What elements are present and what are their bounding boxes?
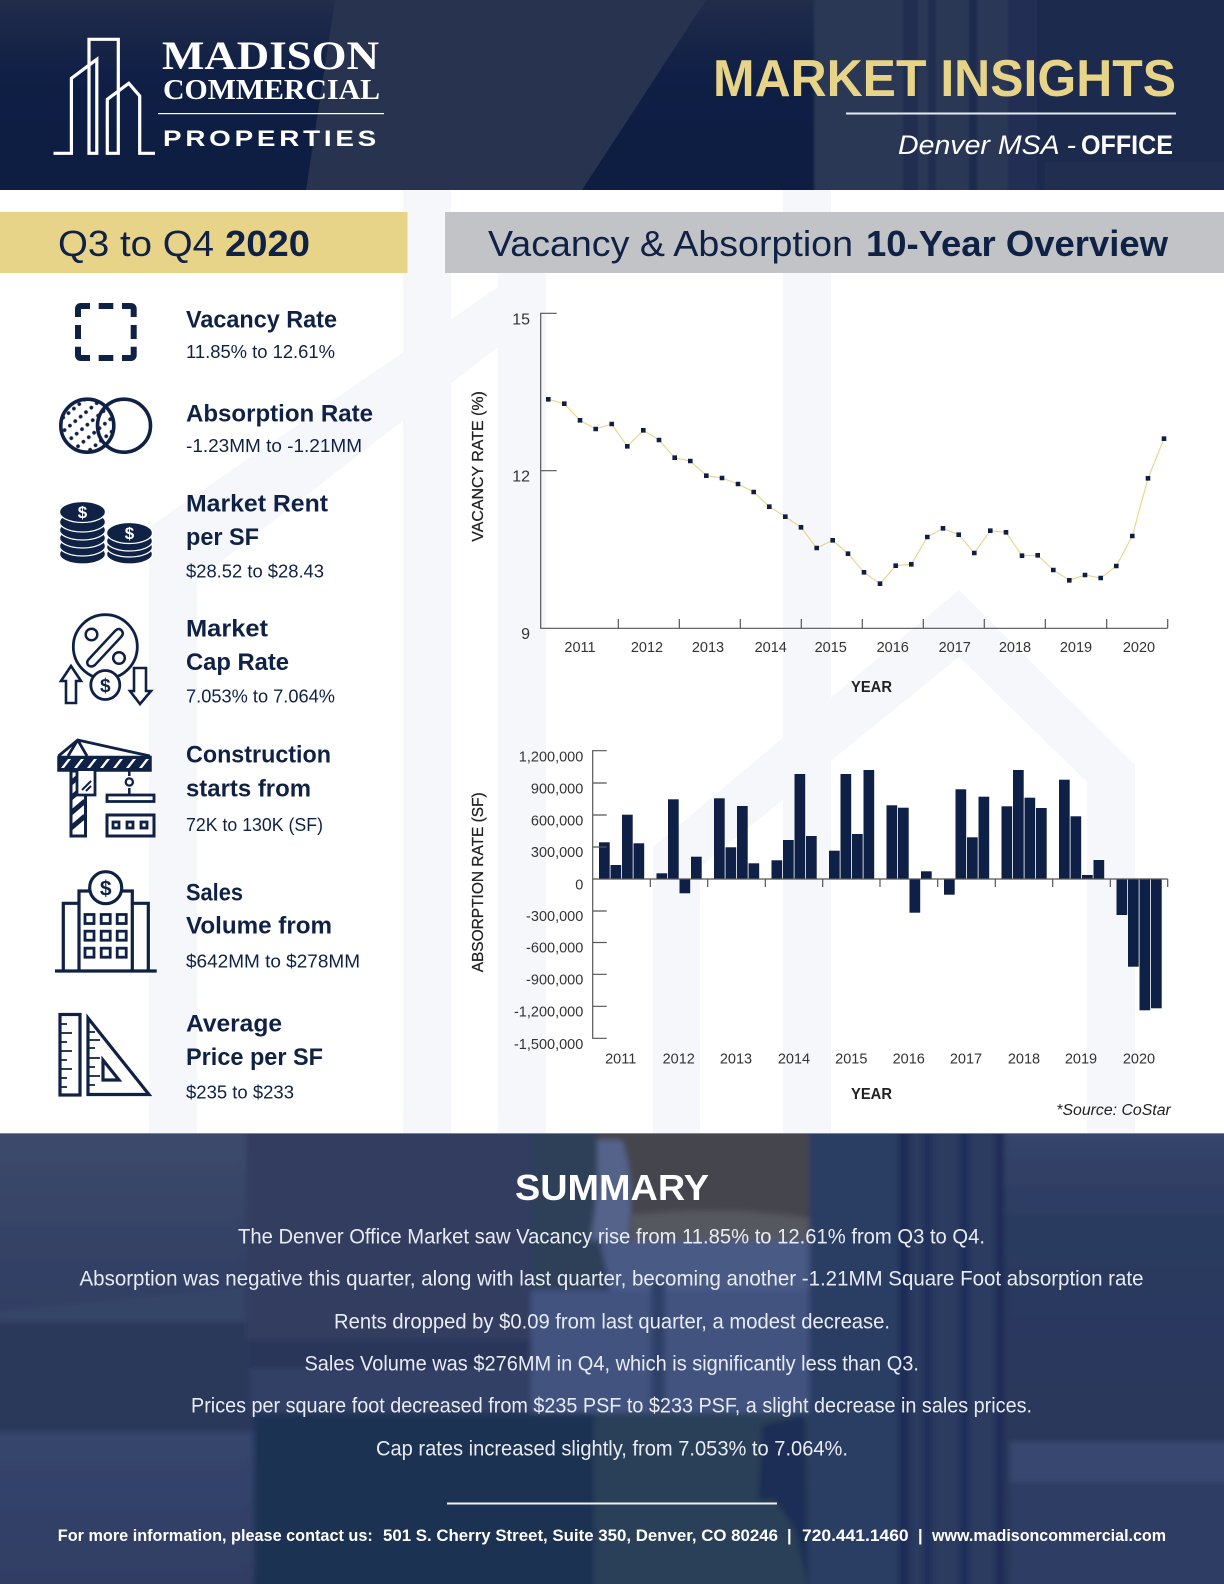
icon: coin stacks: $ xyxy=(125,524,135,543)
x axis labels: 2017 xyxy=(939,640,971,656)
metric heading: Volume from xyxy=(186,912,332,939)
logo wordmark: Properties: PROPERTIES xyxy=(163,126,380,151)
subtitle: Denver MSA Office: Denver MSA - xyxy=(898,130,1076,160)
icon: tower crane xyxy=(58,740,154,836)
header banner xyxy=(0,0,1224,197)
metric heading: Price per SF xyxy=(186,1044,323,1071)
y axis labels: 9 xyxy=(521,626,530,643)
summary text: Rents dropped by $0.09 from last quarter, a modest decrease. xyxy=(334,1310,890,1333)
y axis labels: -600,000 xyxy=(526,941,583,957)
chart axes xyxy=(541,313,1168,628)
x axis labels: 2011 xyxy=(564,640,596,656)
watermark: building outline xyxy=(149,190,1135,1135)
metric heading: Market xyxy=(186,616,268,643)
metric heading: Vacancy Rate xyxy=(186,307,337,334)
data line xyxy=(548,399,1164,584)
y axis labels: 15 xyxy=(512,312,530,329)
icon: overlapping circles xyxy=(61,399,150,452)
summary text: Cap rates increased slightly, from 7.053% to 7.064%. xyxy=(376,1437,848,1460)
x axis labels: 2016 xyxy=(893,1051,925,1067)
logo wordmark: Madison: MADISON xyxy=(162,33,379,78)
metric heading: Absorption Rate xyxy=(186,401,373,428)
summary text xyxy=(80,1225,1144,1460)
summary text: Sales Volume was $276MM in Q4, which is significantly less than Q3. xyxy=(304,1353,919,1376)
summary heading: SUMMARY xyxy=(515,1167,709,1208)
x axis labels: 2019 xyxy=(1060,640,1092,656)
line chart: vacancy rate xyxy=(470,312,1168,696)
background photo tint xyxy=(0,1125,1224,1584)
x axis labels: 2020 xyxy=(1123,640,1155,656)
icon: ruler and set square xyxy=(60,1014,149,1095)
metric value: 11.85% to 12.61% xyxy=(186,342,335,362)
contact line: 501 S. Cherry Street, Suite 350, Denver, CO 80246 xyxy=(383,1527,778,1545)
x axis labels xyxy=(605,1051,1155,1067)
logo: Madison Commercial Properties xyxy=(54,33,384,153)
data markers xyxy=(546,397,1166,586)
contact line: For more information, please contact us: xyxy=(58,1527,373,1545)
panel top edge xyxy=(0,1133,1224,1134)
x axis title: YEAR xyxy=(851,679,892,696)
icon: bank building xyxy=(55,872,157,971)
panel: summary xyxy=(0,1125,1224,1584)
metric: absorption rate xyxy=(61,399,373,456)
y axis labels: 1,200,000 xyxy=(519,750,583,766)
y axis labels xyxy=(512,312,530,643)
heading band: Q3 to Q4 2020: 2020 xyxy=(225,223,310,264)
contact line: | xyxy=(787,1527,792,1545)
x axis title: YEAR xyxy=(851,1086,892,1103)
y axis labels: 900,000 xyxy=(531,781,583,797)
metric heading: Cap Rate xyxy=(186,649,289,676)
x axis labels: 2018 xyxy=(1008,1051,1040,1067)
footer divider xyxy=(447,1502,777,1504)
heading band: Vacancy and Absorption 10-Year Overview xyxy=(445,212,1224,273)
y axis labels: -1,200,000 xyxy=(514,1005,583,1021)
metric value: 72K to 130K (SF) xyxy=(186,815,323,835)
metric: market cap rate xyxy=(61,615,335,707)
heading band: Q3 to Q4 2020: Q3 to Q4 xyxy=(58,223,214,264)
y axis labels: 600,000 xyxy=(531,814,583,830)
x axis labels: 2012 xyxy=(631,640,663,656)
metric heading: starts from xyxy=(186,776,311,803)
icon: coin stacks: $ xyxy=(78,503,88,522)
metric heading: Market Rent xyxy=(186,491,328,518)
contact line: 720.441.1460 xyxy=(802,1527,909,1545)
metric: construction starts xyxy=(58,740,331,836)
metric value: $642MM to $278MM xyxy=(186,952,360,972)
logo wordmark: Commercial: COMMERCIAL xyxy=(163,74,380,106)
summary text: Absorption was negative this quarter, along with last quarter, becoming another -1.21MM Square Foot absorption rate xyxy=(80,1268,1144,1291)
metric heading: Construction xyxy=(186,742,331,769)
icon: bank building: $ xyxy=(100,878,112,900)
x axis labels: 2020 xyxy=(1123,1051,1155,1067)
subtitle: Denver MSA Office xyxy=(898,130,1173,160)
metric heading xyxy=(186,491,328,551)
x axis labels: 2016 xyxy=(877,640,909,656)
heading band: Vacancy and Absorption 10-Year Overview: 10-Year Overview xyxy=(866,223,1169,264)
summary text: The Denver Office Market saw Vacancy rise from 11.85% to 12.61% from Q3 to Q4. xyxy=(238,1225,985,1248)
y axis labels: 12 xyxy=(512,469,530,486)
y axis labels: 0 xyxy=(575,877,583,893)
metric value: -1.23MM to -1.21MM xyxy=(186,436,362,456)
metric: average price xyxy=(60,1011,323,1103)
x axis labels: 2017 xyxy=(950,1051,982,1067)
icon: coin stacks xyxy=(60,502,152,564)
metric value: $28.52 to $28.43 xyxy=(186,562,324,582)
chart axes xyxy=(593,751,1168,1038)
x axis labels xyxy=(564,640,1155,656)
metric heading: Sales xyxy=(186,880,243,907)
subtitle: Denver MSA Office: OFFICE xyxy=(1081,130,1173,160)
heading band: Vacancy and Absorption 10-Year Overview: Vacancy & Absorption xyxy=(488,223,853,264)
metric: vacancy rate xyxy=(78,306,337,362)
metric: market rent xyxy=(60,491,328,582)
x axis labels: 2012 xyxy=(663,1051,695,1067)
x axis labels: 2013 xyxy=(692,640,724,656)
x axis labels: 2014 xyxy=(778,1051,810,1067)
metric: sales volume xyxy=(55,872,360,972)
heading band: Q3 to Q4 2020 xyxy=(0,212,408,273)
x axis labels: 2019 xyxy=(1065,1051,1097,1067)
metric value: 7.053% to 7.064% xyxy=(186,687,335,707)
y axis labels xyxy=(514,750,583,1053)
x axis labels: 2018 xyxy=(999,640,1031,656)
title: Market Insights: MARKET INSIGHTS xyxy=(713,50,1176,108)
y axis labels: -900,000 xyxy=(526,973,583,989)
y axis labels: -300,000 xyxy=(526,909,583,925)
contact line: | xyxy=(918,1527,923,1545)
x axis labels: 2014 xyxy=(755,640,787,656)
x axis labels: 2013 xyxy=(720,1051,752,1067)
panel: quarterly metrics xyxy=(55,306,373,1103)
metric heading: per SF xyxy=(186,524,259,551)
metric heading: Average xyxy=(186,1011,282,1038)
x axis labels: 2011 xyxy=(605,1051,636,1067)
y axis labels: -1,500,000 xyxy=(514,1037,583,1053)
metric value: $235 to $233 xyxy=(186,1083,294,1103)
metric heading xyxy=(186,880,332,939)
y axis title: ABSORPTION RATE (SF) xyxy=(470,792,487,972)
bar chart: absorption rate xyxy=(470,750,1172,1119)
icon: building outline logo xyxy=(54,39,155,153)
contact line: www.madisoncommercial.com xyxy=(931,1527,1166,1545)
summary text: Prices per square foot decreased from $235 PSF to $233 PSF, a slight decrease in sales prices. xyxy=(191,1395,1032,1418)
source note: *Source: CoStar xyxy=(1056,1102,1172,1119)
y axis title: VACANCY RATE (%) xyxy=(470,391,487,542)
contact line xyxy=(58,1527,1166,1545)
x axis labels: 2015 xyxy=(835,1051,867,1067)
bars xyxy=(599,770,1162,1010)
metric heading xyxy=(186,742,331,803)
metric heading xyxy=(186,616,289,676)
icon: percent coin with arrows xyxy=(61,615,151,704)
x axis labels: 2015 xyxy=(815,640,847,656)
metric heading xyxy=(186,1011,323,1071)
logo divider xyxy=(158,113,384,114)
title divider xyxy=(846,112,1176,114)
icon: percent coin with arrows: $ xyxy=(100,676,111,697)
icon: dashed square xyxy=(78,306,134,358)
y axis labels: 300,000 xyxy=(531,845,583,861)
